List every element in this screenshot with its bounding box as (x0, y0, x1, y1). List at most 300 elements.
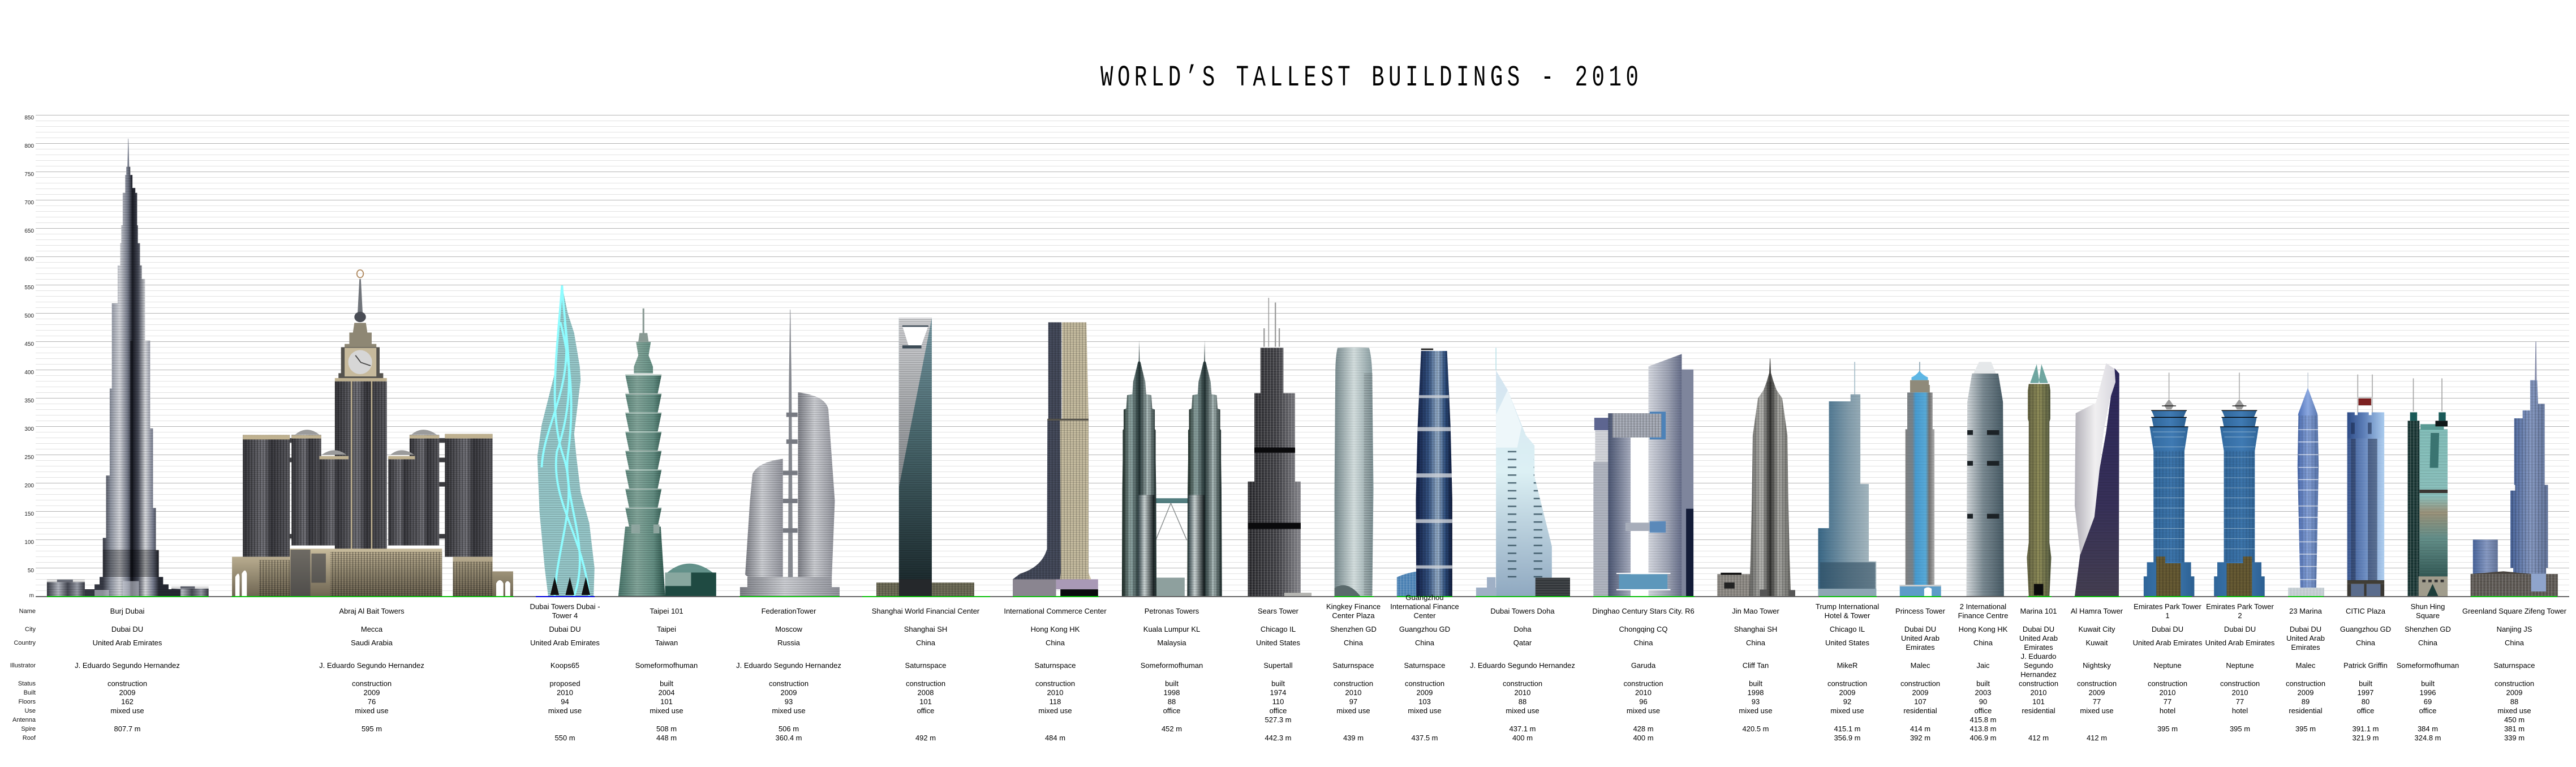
column: Federation Tower: FederationTower (762, 607, 816, 615)
spire and mast (788, 310, 793, 577)
row labels: Antenna (12, 717, 36, 723)
crown peaks (2030, 364, 2048, 383)
column: Trump International Hotel & Tower (1816, 602, 1879, 742)
column: CITIC Plaza: 391.1 m (2353, 725, 2379, 733)
low blocks (1476, 577, 1524, 596)
clock face (348, 350, 372, 374)
tower (1416, 351, 1452, 596)
base details (1760, 590, 1795, 596)
column: Shun Hing Square: 69 (2424, 697, 2432, 706)
light facet (1496, 390, 1521, 448)
podium left (47, 580, 85, 597)
column: Emirates Park Tower 2: 2 (2238, 611, 2242, 620)
column: Shun Hing Square: office (2419, 706, 2436, 715)
column: Princess Tower: 107 (1914, 697, 1926, 706)
body (2214, 427, 2265, 596)
column: Al Hamra Tower: Al Hamra Tower (2071, 607, 2123, 615)
column: Kingkey Finance Center Plaza: 2010 (1345, 688, 1361, 697)
column: Princess Tower: Princess Tower (1895, 607, 1946, 615)
building: Shun Hing Square (2408, 378, 2448, 596)
column: Emirates Park Tower 2: 2010 (2232, 688, 2248, 697)
floors (1335, 348, 1374, 596)
olive core (2156, 556, 2181, 596)
column: Taipei 101: 508 m (656, 725, 677, 733)
column: Kingkey Finance Center Plaza: Shenzhen GD (1330, 625, 1377, 633)
column: Federation Tower: J. Eduardo Segundo Hernandez (736, 661, 841, 670)
column: 2 International Finance Centre: Jaic (1976, 661, 1990, 670)
y axis labels: 600 (24, 256, 34, 263)
building: Al Hamra Tower (2075, 363, 2119, 596)
section highlights (625, 374, 661, 508)
column: Federation Tower: 506 m (779, 725, 799, 733)
column: Emirates Park Tower 2: hotel (2232, 706, 2248, 715)
podium entrances (551, 577, 590, 595)
column: Emirates Park Tower 1: Emirates Park Tower (2134, 602, 2202, 611)
spire (1919, 362, 1920, 371)
beige wing (1060, 322, 1091, 579)
column: Sears Tower: 442.3 m (1265, 734, 1291, 742)
podium dark blocks (290, 550, 326, 597)
building: Kingkey Finance Center Plaza (1335, 348, 1374, 596)
building: Guangzhou International Finance Center (1397, 349, 1452, 596)
column: Emirates Park Tower 2: Emirates Park Tower (2206, 602, 2274, 611)
column: Princess Tower: Malec (1911, 661, 1930, 670)
column: Dubai Towers Dubai - Tower 4: proposed (549, 679, 580, 688)
column: 23 Marina: United Arab (2286, 634, 2325, 642)
annex roof (1721, 573, 1741, 575)
column: Sears Tower: Sears Tower (1258, 607, 1299, 615)
column: Greenland Square Zifeng Tower (2462, 607, 2567, 742)
building: Emirates Park Tower 2 (2214, 372, 2265, 596)
column: Trump International Hotel & Tower: United States (1825, 639, 1870, 647)
column: 23 Marina: construction (2286, 679, 2325, 688)
column: Jin Mao Tower: Shanghai SH (1734, 625, 1777, 633)
podium windows (259, 552, 493, 597)
left tower (1122, 340, 1156, 596)
column: 23 Marina: 23 Marina (2289, 607, 2323, 615)
annex (1717, 574, 1750, 596)
building: Dubai Towers Doha (1476, 348, 1570, 596)
column: Emirates Park Tower 1: 1 (2165, 611, 2170, 620)
column: Emirates Park Tower 1: hotel (2160, 706, 2175, 715)
column: 23 Marina (2286, 607, 2325, 733)
column: International Commerce Center: 118 (1050, 697, 1061, 706)
column: Sears Tower: United States (1256, 639, 1301, 647)
tower shaft (1248, 348, 1301, 596)
building: Taipei 101 (618, 308, 716, 596)
floors (2510, 380, 2548, 592)
side tower floors (2473, 539, 2498, 574)
column: Emirates Park Tower 1: Dubai DU (2152, 625, 2183, 633)
y axis labels: 350 (24, 398, 34, 404)
tower floors (85, 167, 180, 597)
column: Emirates Park Tower 1: construction (2148, 679, 2187, 688)
base entrance (1060, 589, 1098, 596)
tower (1335, 348, 1374, 596)
dark wing (1013, 322, 1062, 579)
central notch (2430, 433, 2439, 468)
column: Sears Tower: 110 (1272, 697, 1284, 706)
y axis labels: 100 (24, 539, 34, 546)
annex dome (667, 564, 713, 572)
column: Dubai Towers Doha: 88 (1519, 697, 1526, 706)
column: Abraj Al Bait Towers: J. Eduardo Segundo Hernandez (319, 661, 424, 670)
column: Abraj Al Bait Towers: 595 m (362, 725, 382, 733)
side tower (2473, 539, 2498, 574)
column: Petronas Towers: 1998 (1164, 688, 1180, 697)
floors (2075, 368, 2119, 596)
column: 23 Marina: 2009 (2298, 688, 2313, 697)
column: Kingkey Finance Center Plaza: 97 (1349, 697, 1357, 706)
tower 6 (445, 434, 493, 557)
column: Dinghao Century Stars City R6: construction (1623, 679, 1663, 688)
annex (665, 572, 716, 596)
column: Shanghai World Financial Center: China (916, 639, 936, 647)
y axis labels: m (29, 593, 34, 599)
column: Emirates Park Tower 1: United Arab Emirates (2133, 639, 2203, 647)
column: Federation Tower: construction (769, 679, 809, 688)
column: Kingkey Finance Center Plaza: construction (1334, 679, 1373, 688)
column: Petronas Towers: Someformofhuman (1141, 661, 1203, 670)
column: Al Hamra Tower: 2009 (2089, 688, 2105, 697)
column: Marina 101: Marina 101 (2020, 607, 2057, 615)
base (2347, 580, 2384, 584)
column: Greenland Square Zifeng Tower: 381 m (2504, 725, 2525, 733)
podium grid (2471, 574, 2558, 596)
base (2288, 588, 2324, 596)
cyan twist lines (541, 285, 590, 596)
podium (232, 549, 513, 597)
column: Sears Tower: office (1270, 706, 1287, 715)
main tower (2419, 429, 2448, 596)
column: Jin Mao Tower: 420.5 m (1743, 725, 1769, 733)
column: Petronas Towers: 88 (1168, 697, 1176, 706)
column: Kingkey Finance Center Plaza: Kingkey Finance (1326, 602, 1381, 611)
y axis labels: 200 (24, 483, 34, 489)
base (740, 577, 840, 596)
spire (2239, 372, 2240, 399)
column: Trump International Hotel & Tower: Trump International (1816, 602, 1879, 611)
column: Abraj Al Bait Towers: Saudi Arabia (351, 639, 393, 647)
column: Dubai Towers Dubai - Tower 4: 550 m (554, 734, 575, 742)
column: Burj Dubai: 2009 (119, 688, 135, 697)
tower 5 (410, 435, 439, 546)
right dark strip (1682, 370, 1693, 596)
column: International Commerce Center: Hong Kong HK (1031, 625, 1080, 633)
column: Dubai Towers Doha: mixed use (1506, 706, 1539, 715)
body (2144, 427, 2194, 596)
crown lines (2220, 405, 2259, 427)
crown (2222, 411, 2257, 427)
column: Trump International Hotel & Tower: 415.1 m (1834, 725, 1860, 733)
slab (2408, 421, 2419, 596)
base entry (2427, 584, 2438, 596)
bridges (290, 438, 445, 538)
column: Jin Mao Tower: 1998 (1748, 688, 1764, 697)
base right (1056, 579, 1098, 589)
column: Kingkey Finance Center Plaza: Saturnspace (1333, 661, 1374, 670)
column: Dubai Towers Doha (1470, 607, 1575, 742)
bridge legs (1156, 503, 1187, 540)
base (2419, 576, 2448, 596)
tower (85, 139, 180, 597)
column: Guangzhou International Finance Center: construction (1405, 679, 1444, 688)
column: Kingkey Finance Center Plaza (1326, 602, 1381, 742)
column: Shun Hing Square: Square (2416, 611, 2440, 620)
column: Jin Mao Tower (1732, 607, 1779, 733)
column: Shun Hing Square (2397, 602, 2459, 742)
tower front (2531, 573, 2546, 592)
column: Taipei 101: 101 (660, 697, 673, 706)
beige tower caps (243, 378, 493, 550)
column: Greenland Square Zifeng Tower: Nanjing JS (2497, 625, 2532, 633)
row labels: Floors (18, 699, 36, 705)
crown bands (1910, 380, 1930, 392)
column: Jin Mao Tower: mixed use (1739, 706, 1773, 715)
column: Marina 101: Hernandez (2020, 670, 2057, 679)
column: Shun Hing Square: 384 m (2418, 725, 2438, 733)
light bands (2223, 432, 2256, 549)
column: Dubai Towers Doha: Dubai Towers Doha (1490, 607, 1555, 615)
column: Dubai Towers Doha: J. Eduardo Segundo Hernandez (1470, 661, 1575, 670)
row labels: Illustrator (10, 662, 36, 669)
column: 2 International Finance Centre: 90 (1979, 697, 1987, 706)
dark entrance (2034, 584, 2043, 595)
slab upper (1595, 430, 1610, 462)
column: Abraj Al Bait Towers: construction (352, 679, 392, 688)
column: Al Hamra Tower: Nightsky (2083, 661, 2111, 670)
column: Shanghai World Financial Center: 2008 (918, 688, 934, 697)
clock frame (345, 348, 376, 376)
base (1818, 589, 1876, 596)
row labels (10, 608, 36, 742)
column: Princess Tower: Dubai DU (1904, 625, 1936, 633)
column: Greenland Square Zifeng Tower: Saturnspace (2494, 661, 2535, 670)
column: Federation Tower: 2009 (781, 688, 797, 697)
column: Marina 101: 412 m (2028, 734, 2049, 742)
red sign (2359, 399, 2371, 405)
building: Trump International Hotel & Tower (1818, 362, 1876, 596)
stripes (1536, 578, 1570, 596)
tower (1749, 358, 1791, 596)
right edge fins (1364, 374, 1373, 596)
tower (2347, 412, 2384, 580)
floors (1818, 395, 1876, 596)
central seam (130, 341, 133, 597)
window dashes (1508, 435, 1551, 579)
building: Shanghai World Financial Center (876, 318, 974, 596)
column: Trump International Hotel & Tower: mixed use (1830, 706, 1864, 715)
column: Guangzhou International Finance Center: Guangzhou (1405, 593, 1444, 602)
column: Petronas Towers: 452 m (1162, 725, 1182, 733)
column: Trump International Hotel & Tower: Chicago IL (1830, 625, 1865, 633)
column: Federation Tower (736, 607, 841, 742)
dark lower block (103, 550, 159, 577)
column: Burj Dubai: 162 (121, 697, 134, 706)
column: Al Hamra Tower: mixed use (2080, 706, 2114, 715)
domes (295, 430, 437, 455)
column: Jin Mao Tower: China (1746, 639, 1766, 647)
column: Dinghao Century Stars City R6: Chongqing CQ (1619, 625, 1668, 633)
building: Abraj Al Bait Towers (232, 270, 513, 597)
column: Taipei 101: Taipei (657, 625, 676, 633)
column: 2 International Finance Centre: 415.8 m (1970, 715, 1996, 724)
column: Al Hamra Tower (2071, 607, 2123, 742)
column: Trump International Hotel & Tower: construction (1827, 679, 1867, 688)
column: Sears Tower: Chicago IL (1261, 625, 1296, 633)
row labels: City (25, 626, 36, 633)
column: Shanghai World Financial Center: Shanghai World Financial Center (872, 607, 980, 615)
column: Shun Hing Square: built (2421, 679, 2435, 688)
y axis labels: 450 (24, 341, 34, 348)
core stripes (2227, 556, 2252, 596)
column: Petronas Towers: office (1163, 706, 1180, 715)
column: 2 International Finance Centre: 2 International (1960, 602, 2006, 611)
column: Kingkey Finance Center Plaza: Center Plaza (1332, 611, 1375, 620)
column: Jin Mao Tower: Cliff Tan (1743, 661, 1769, 670)
base window row (2422, 580, 2444, 582)
column: Dubai Towers Dubai - Tower 4: Dubai DU (549, 625, 581, 633)
orb (354, 312, 366, 322)
building: Jin Mao Tower (1717, 358, 1795, 596)
spire bases (2410, 412, 2446, 421)
column: Dubai Towers Doha: Qatar (1513, 639, 1532, 647)
y axis labels: 800 (24, 143, 34, 149)
column: Dubai Towers Doha: 2010 (1515, 688, 1530, 697)
building: Burj Dubai (47, 139, 209, 597)
white bands (2298, 429, 2318, 580)
column: 23 Marina: Dubai DU (2290, 625, 2321, 633)
spires (2413, 378, 2442, 412)
column: Princess Tower: 414 m (1910, 725, 1930, 733)
column: Princess Tower: Emirates (1906, 643, 1935, 652)
column: Dubai Towers Doha: Doha (1513, 625, 1532, 633)
arches (235, 571, 510, 597)
column: Guangzhou International Finance Center: International Finance (1390, 602, 1459, 611)
body grid (2153, 451, 2184, 562)
windows (1248, 348, 1301, 596)
podium right (171, 586, 209, 597)
column: Federation Tower: 93 (785, 697, 793, 706)
base annex (1284, 593, 1311, 596)
column: Taipei 101: mixed use (650, 706, 683, 715)
column: Dinghao Century Stars City R6: Dinghao Century Stars City. R6 (1592, 607, 1695, 615)
far left slab (1593, 462, 1608, 596)
spire (1495, 348, 1496, 370)
column: Greenland Square Zifeng Tower: 88 (2510, 697, 2518, 706)
column: Marina 101: residential (2022, 706, 2055, 715)
column: Dubai Towers Doha: 437.1 m (1510, 725, 1536, 733)
column: 23 Marina: Emirates (2291, 643, 2320, 652)
column: Greenland Square Zifeng Tower: construction (2495, 679, 2534, 688)
y axis labels: 550 (24, 285, 34, 291)
column: 23 Marina: Malec (2296, 661, 2316, 670)
column: Shun Hing Square: 1996 (2420, 688, 2436, 697)
column: CITIC Plaza: 321.9 m (2353, 734, 2379, 742)
column: Guangzhou International Finance Center (1390, 593, 1459, 742)
column: Greenland Square Zifeng Tower: 450 m (2504, 715, 2525, 724)
building: 23 Marina (2288, 372, 2324, 596)
column: Petronas Towers: Malaysia (1157, 639, 1186, 647)
column: Marina 101: Dubai DU (2023, 625, 2054, 633)
column: Kingkey Finance Center Plaza: China (1344, 639, 1364, 647)
column: Marina 101: United Arab (2019, 634, 2058, 642)
building: Emirates Park Tower 1 (2144, 372, 2194, 596)
column: Abraj Al Bait Towers: mixed use (355, 706, 389, 715)
y axis labels: 250 (24, 455, 34, 461)
column: 2 International Finance Centre: Hong Kong HK (1959, 625, 2008, 633)
mechanical bands (1967, 430, 1999, 519)
column: Federation Tower: mixed use (772, 706, 806, 715)
medallions (631, 524, 660, 533)
floors (1906, 392, 1934, 585)
y axis labels: 750 (24, 172, 34, 178)
column: CITIC Plaza: Patrick Griffin (2343, 661, 2388, 670)
column: Abraj Al Bait Towers: 2009 (364, 688, 380, 697)
column: Federation Tower: 360.4 m (776, 734, 802, 742)
right tower (1187, 340, 1222, 596)
column: Al Hamra Tower: construction (2077, 679, 2117, 688)
spire (638, 308, 648, 342)
tower (1966, 374, 2004, 596)
chart grid: height scale in metres (36, 115, 2569, 596)
column: International Commerce Center: 484 m (1045, 734, 1065, 742)
column: Burj Dubai: construction (107, 679, 147, 688)
column: Shanghai World Financial Center (872, 607, 980, 742)
column: Dubai Towers Dubai - Tower 4 (530, 602, 600, 742)
column: Burj Dubai: J. Eduardo Segundo Hernandez (75, 661, 180, 670)
annex floors (1397, 572, 1417, 596)
column: Dubai Towers Dubai - Tower 4: Koops65 (551, 661, 579, 670)
right tower (1649, 354, 1682, 596)
column: Dinghao Century Stars City R6: Garuda (1631, 661, 1656, 670)
strip base (1686, 509, 1693, 596)
floors (1593, 354, 1682, 596)
spire (2535, 341, 2537, 380)
column: Taipei 101: Someformofhuman (635, 661, 698, 670)
row labels: Name (19, 608, 36, 615)
y axis labels: 50 (28, 568, 34, 574)
divider (1047, 419, 1089, 421)
column: CITIC Plaza: China (2356, 639, 2376, 647)
column: CITIC Plaza: 80 (2362, 697, 2369, 706)
column: Taipei 101: Taiwan (655, 639, 678, 647)
base columns (2347, 584, 2384, 596)
column: Burj Dubai: Burj Dubai (110, 607, 144, 615)
podium (2471, 571, 2558, 596)
column: Shun Hing Square: China (2418, 639, 2438, 647)
low-rise base (876, 582, 974, 596)
column: Princess Tower: 392 m (1910, 734, 1930, 742)
base bright block (94, 581, 139, 597)
annex window (1724, 582, 1735, 589)
column: Guangzhou International Finance Center: Guangzhou GD (1399, 625, 1450, 633)
floors (1966, 374, 2004, 596)
column: Shanghai World Financial Center: Saturnspace (905, 661, 946, 670)
dome (1911, 371, 1928, 380)
column: Dubai Towers Dubai - Tower 4: 2010 (557, 688, 573, 697)
column: Marina 101: 101 (2032, 697, 2045, 706)
clock hands (355, 355, 371, 366)
column: Greenland Square Zifeng Tower: Greenland Square Zifeng Tower (2462, 607, 2567, 615)
column: 23 Marina: 89 (2302, 697, 2310, 706)
finial (2164, 399, 2174, 409)
column: International Commerce Center: Saturnspace (1034, 661, 1076, 670)
spire (1854, 362, 1855, 395)
annex (1397, 572, 1417, 596)
column: CITIC Plaza: built (2359, 679, 2372, 688)
bridge floors (1612, 413, 1665, 438)
